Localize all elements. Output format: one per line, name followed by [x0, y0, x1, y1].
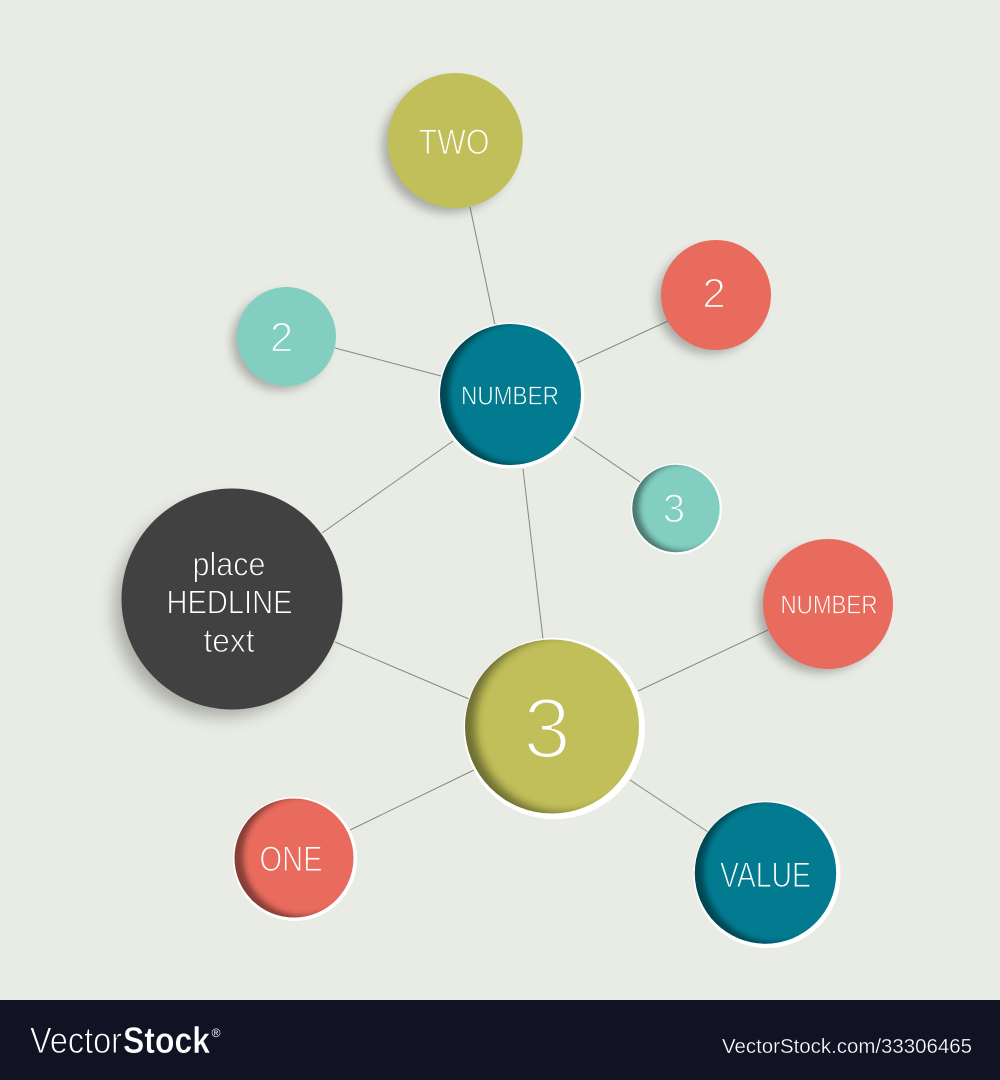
footer bar	[0, 1000, 1000, 1080]
circle: NUMBER hub	[438, 322, 584, 468]
circle: headline: text	[204, 622, 254, 659]
circle: TWO	[382, 73, 523, 213]
circle: teal 3: 3	[663, 487, 685, 531]
circle: NUMBER hub: NUMBER	[461, 380, 559, 410]
circle: headline	[114, 488, 342, 717]
circle: ONE: ONE	[260, 840, 322, 879]
circle: TWO: TWO	[418, 123, 490, 162]
circle: red NUMBER: NUMBER	[780, 590, 878, 620]
image id: VectorStock.com/33306465	[722, 1036, 972, 1058]
circle: headline: HEDLINE	[166, 584, 292, 620]
circle: red 2	[656, 240, 771, 354]
logo: VectorStock: Stock	[123, 1020, 210, 1061]
circle: olive 3	[464, 638, 645, 820]
circle: red NUMBER	[757, 539, 893, 673]
circle: teal 2	[232, 287, 336, 390]
circle: red 2: 2	[702, 270, 726, 316]
registered mark: ®	[212, 1026, 221, 1040]
circle: teal 2: 2	[270, 314, 293, 360]
connector lines	[322, 207, 768, 832]
circle: ONE	[233, 797, 357, 921]
circle: VALUE	[694, 801, 840, 948]
circle: olive 3: 3	[523, 682, 571, 776]
logo: VectorStock: Vector	[30, 1020, 122, 1061]
circle: teal 3	[631, 464, 722, 554]
circle: VALUE: VALUE	[720, 856, 811, 895]
logo: VectorStock	[30, 1020, 210, 1061]
circle: headline: place	[192, 546, 266, 582]
